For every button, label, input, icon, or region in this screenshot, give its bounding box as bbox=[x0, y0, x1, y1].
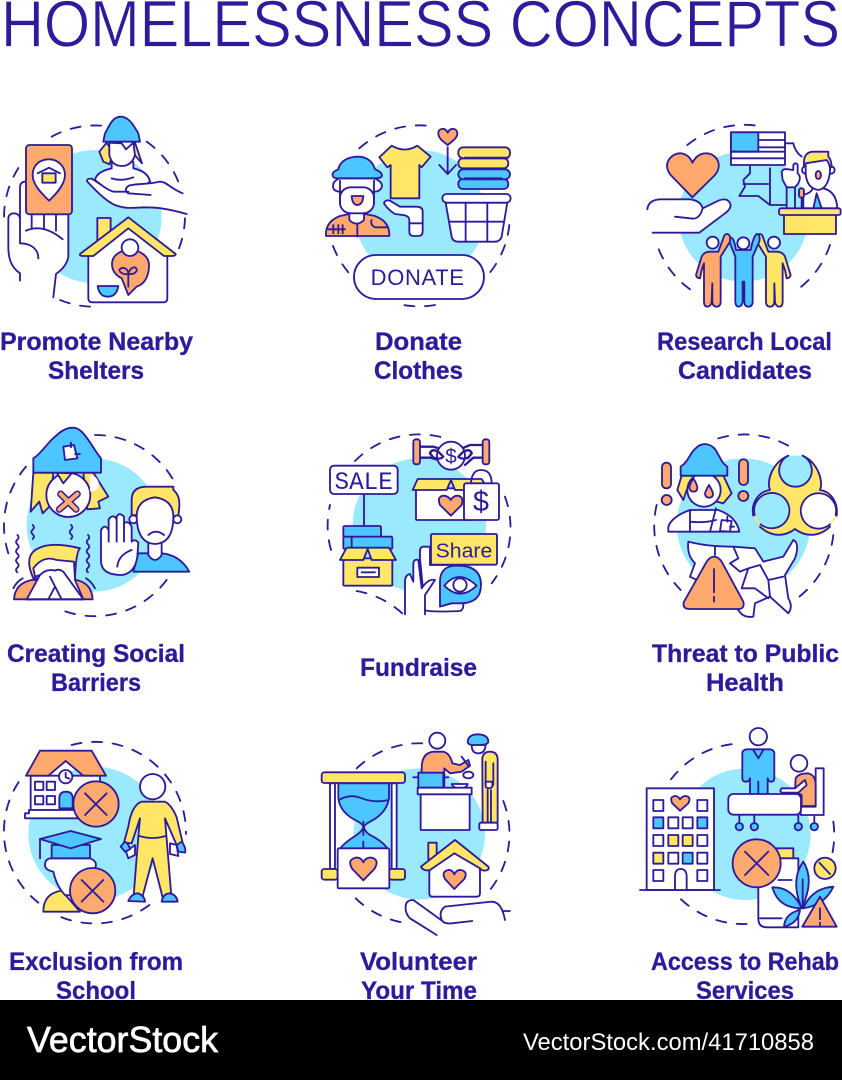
label: Services bbox=[696, 977, 794, 1005]
footer url: VectorStock.com/41710858 bbox=[523, 1029, 814, 1056]
panel: creating social barriers bbox=[4, 428, 189, 697]
icon: hospital, patient bed, crossed bottle, plant and warning bbox=[640, 728, 837, 927]
label bbox=[657, 328, 832, 385]
icon: man, t-shirt, sock, towels, basket and donate button: DONATE bbox=[371, 265, 465, 290]
label bbox=[374, 328, 463, 385]
label: Barriers bbox=[51, 669, 141, 697]
icon: sale sign, books box, handshake, donation box, share phone bbox=[328, 434, 511, 614]
label: Shelters bbox=[48, 357, 144, 385]
icon: sale sign, books box, handshake, donation box, share phone: SALE bbox=[334, 469, 393, 497]
label: Donate bbox=[375, 328, 462, 356]
label bbox=[652, 640, 839, 697]
footer logo: VectorStock bbox=[27, 1019, 219, 1060]
icon: man, t-shirt, sock, towels, basket and donate button bbox=[326, 125, 511, 306]
label: Your Time bbox=[361, 977, 477, 1005]
label: Research Local bbox=[657, 328, 832, 356]
icon: phone, person in hand and shelter house bbox=[4, 117, 187, 307]
label: Volunteer bbox=[360, 948, 477, 976]
icon: heart in hand, flag, speaker and group bbox=[647, 125, 841, 307]
icon: hourglass, cook, house and hand bbox=[322, 733, 510, 935]
footer bar bbox=[0, 1000, 842, 1080]
icon: sale sign, books box, handshake, donation box, share phone: Share bbox=[436, 540, 492, 563]
icon: sick person, biohazard, map and warning bbox=[654, 434, 837, 617]
label bbox=[360, 948, 477, 1005]
icon: sale sign, books box, handshake, donation box, share phone: $ bbox=[445, 445, 457, 468]
label: Fundraise bbox=[360, 654, 477, 682]
label: Creating Social bbox=[7, 640, 185, 668]
panel: fundraise bbox=[328, 434, 511, 682]
label: Exclusion from bbox=[9, 948, 183, 976]
panel: exclusion from school bbox=[4, 742, 186, 1005]
label: Candidates bbox=[678, 357, 812, 385]
label: Promote Nearby bbox=[0, 328, 193, 356]
panel: volunteer your time bbox=[322, 733, 510, 1005]
icon: gagged person, stop hand and crying person bbox=[4, 428, 189, 616]
icon: school, graduate, crossed circles and person with empty pockets bbox=[4, 742, 186, 923]
panel: donate clothes bbox=[326, 125, 511, 385]
panel: promote nearby shelters bbox=[0, 117, 193, 385]
icon: sale sign, books box, handshake, donation box, share phone: $ bbox=[473, 486, 489, 518]
label: School bbox=[56, 977, 136, 1005]
label: Health bbox=[706, 669, 784, 697]
label bbox=[651, 948, 839, 1005]
panel: research local candidates bbox=[647, 125, 841, 385]
panel: threat to public health bbox=[652, 434, 839, 697]
label bbox=[0, 328, 193, 385]
label bbox=[9, 948, 183, 1005]
label bbox=[7, 640, 185, 697]
panel: access to rehab services bbox=[640, 728, 839, 1005]
label: Threat to Public bbox=[652, 640, 839, 668]
label: Clothes bbox=[374, 357, 463, 385]
